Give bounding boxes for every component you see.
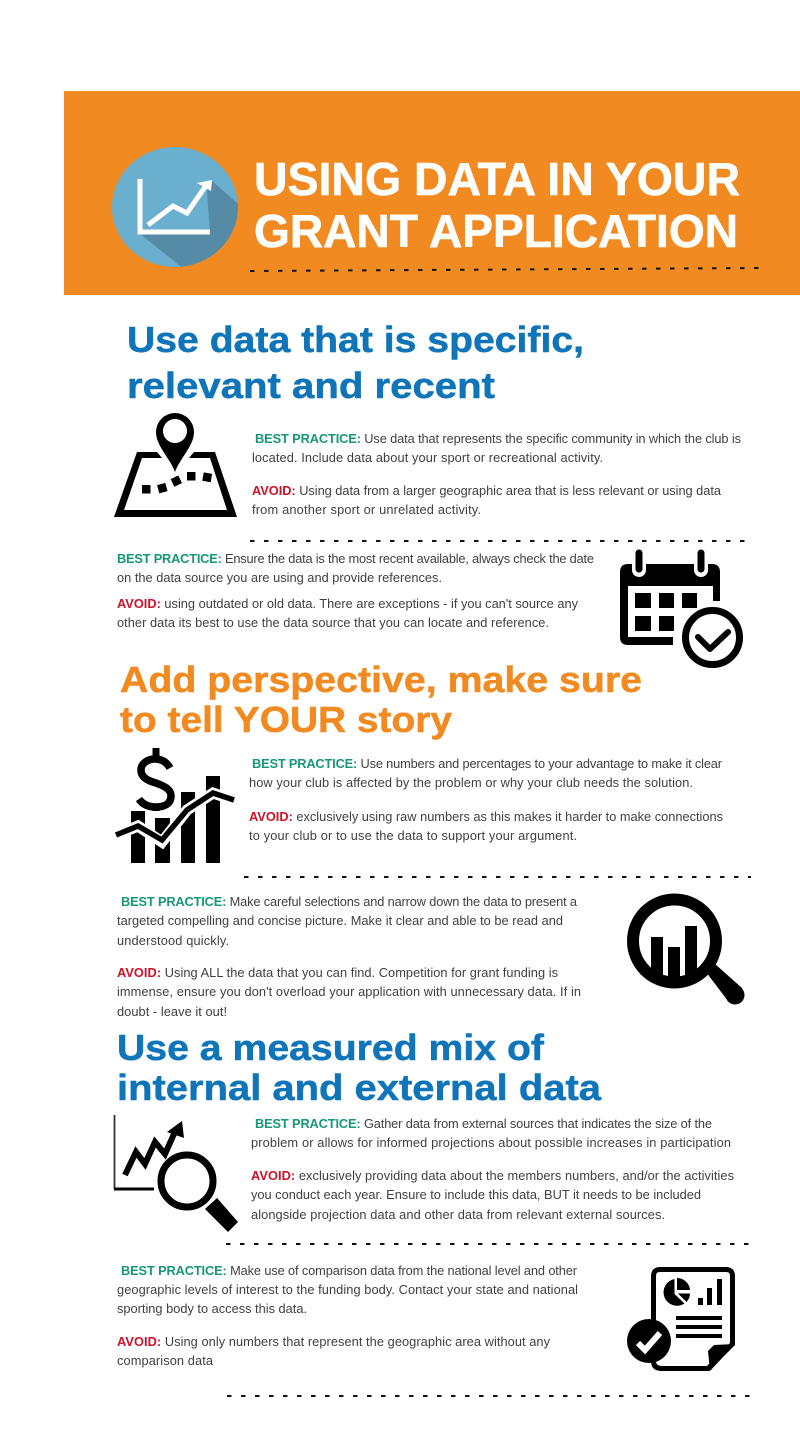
text: recency best practice and avoid: on the data source you are using and provide references. bbox=[117, 570, 442, 585]
text: location best practice and avoid: BEST PRACTICE: Use data that represents the specific community in which the club is bbox=[255, 431, 741, 446]
section 3 heading bbox=[117, 1027, 602, 1108]
text: comparison best practice and avoid: BEST PRACTICE: Make use of comparison data from the national level and other bbox=[121, 1263, 578, 1278]
text: external data best practice and avoid: problem or allows for informed projections about possible increases in participation bbox=[251, 1135, 731, 1150]
icon: line chart in circle bbox=[112, 147, 238, 267]
text: external data best practice and avoid bbox=[251, 1116, 734, 1222]
text: perspective best practice and avoid bbox=[249, 756, 723, 843]
text: selection best practice and avoid: BEST PRACTICE: Make careful selections and narrow down the data to present a bbox=[121, 894, 578, 909]
text: comparison best practice and avoid bbox=[117, 1263, 578, 1368]
icon: calendar with check bbox=[620, 552, 740, 664]
text: recency best practice and avoid bbox=[117, 551, 594, 630]
text: location best practice and avoid bbox=[252, 431, 741, 517]
icon: magnifier with bars bbox=[633, 900, 744, 1004]
section 3 heading: internal and external data bbox=[117, 1067, 602, 1108]
text: comparison best practice and avoid: comparison data bbox=[117, 1353, 214, 1368]
text: selection best practice and avoid bbox=[117, 894, 581, 1019]
section 2 heading: Add perspective, make sure bbox=[120, 659, 642, 700]
text: selection best practice and avoid: targeted compelling and concise picture. Make it clear and able to be read and bbox=[117, 913, 563, 928]
text: perspective best practice and avoid: BEST PRACTICE: Use numbers and percentages to your advantage to make it clear bbox=[252, 756, 723, 771]
text: comparison best practice and avoid: AVOID: Using only numbers that represent the geographic area without any bbox=[117, 1334, 551, 1349]
icon: dollar and rising bars bbox=[116, 748, 234, 863]
text: comparison best practice and avoid: sporting body to access this data. bbox=[117, 1301, 307, 1316]
icon: report with check bbox=[627, 1270, 735, 1371]
text: location best practice and avoid: from another sport or unrelated activity. bbox=[252, 502, 481, 517]
section 1 heading bbox=[127, 319, 584, 406]
text: recency best practice and avoid: other data its best to use the data source that you can locate and reference. bbox=[117, 615, 549, 630]
section 2 heading: to tell YOUR story bbox=[120, 699, 453, 740]
text: comparison best practice and avoid: geographic levels of interest to the funding body. Contact your state and national bbox=[117, 1282, 578, 1297]
section 2 heading bbox=[120, 659, 642, 740]
text: external data best practice and avoid: you conduct each year. Ensure to include this data, BUT it needs to be included bbox=[251, 1187, 701, 1202]
section 1 heading: relevant and recent bbox=[127, 365, 495, 406]
text: selection best practice and avoid: immense, ensure you don't overload your application with unnecessary data. If in bbox=[117, 984, 581, 999]
text: selection best practice and avoid: doubt - leave it out! bbox=[117, 1004, 227, 1019]
text: external data best practice and avoid: AVOID: exclusively providing data about the members numbers, and/or the activities bbox=[251, 1168, 734, 1183]
section 3 heading: Use a measured mix of bbox=[117, 1027, 545, 1068]
title: GRANT APPLICATION bbox=[254, 205, 738, 257]
icon: map with location pin bbox=[114, 413, 237, 517]
header banner bbox=[64, 91, 800, 295]
text: external data best practice and avoid: BEST PRACTICE: Gather data from external sources that indicates the size of the bbox=[255, 1116, 712, 1131]
text: perspective best practice and avoid: AVOID: exclusively using raw numbers as this makes it harder to make connections bbox=[249, 809, 723, 824]
text: external data best practice and avoid: alongside projection data and other data from relevant external sources. bbox=[251, 1207, 665, 1222]
text: location best practice and avoid: located. Include data about your sport or recreational activity. bbox=[252, 450, 603, 465]
text: selection best practice and avoid: understood quickly. bbox=[117, 933, 229, 948]
text: recency best practice and avoid: AVOID: using outdated or old data. There are exceptions - if you can't source any bbox=[117, 596, 579, 611]
icon: chart with magnifier bbox=[114, 1115, 238, 1232]
text: selection best practice and avoid: AVOID: Using ALL the data that you can find. Competition for grant funding is bbox=[117, 965, 558, 980]
title bbox=[254, 153, 740, 257]
text: perspective best practice and avoid: how your club is affected by the problem or why your club needs the solution. bbox=[249, 775, 693, 790]
text: perspective best practice and avoid: to your club or to use the data to support your argument. bbox=[249, 828, 577, 843]
text: location best practice and avoid: AVOID: Using data from a larger geographic area that is less relevant or using data bbox=[252, 483, 722, 498]
text: recency best practice and avoid: BEST PRACTICE: Ensure the data is the most recent available, always check the date bbox=[117, 551, 594, 566]
title: USING DATA IN YOUR bbox=[254, 153, 740, 205]
section 1 heading: Use data that is specific, bbox=[127, 319, 584, 360]
